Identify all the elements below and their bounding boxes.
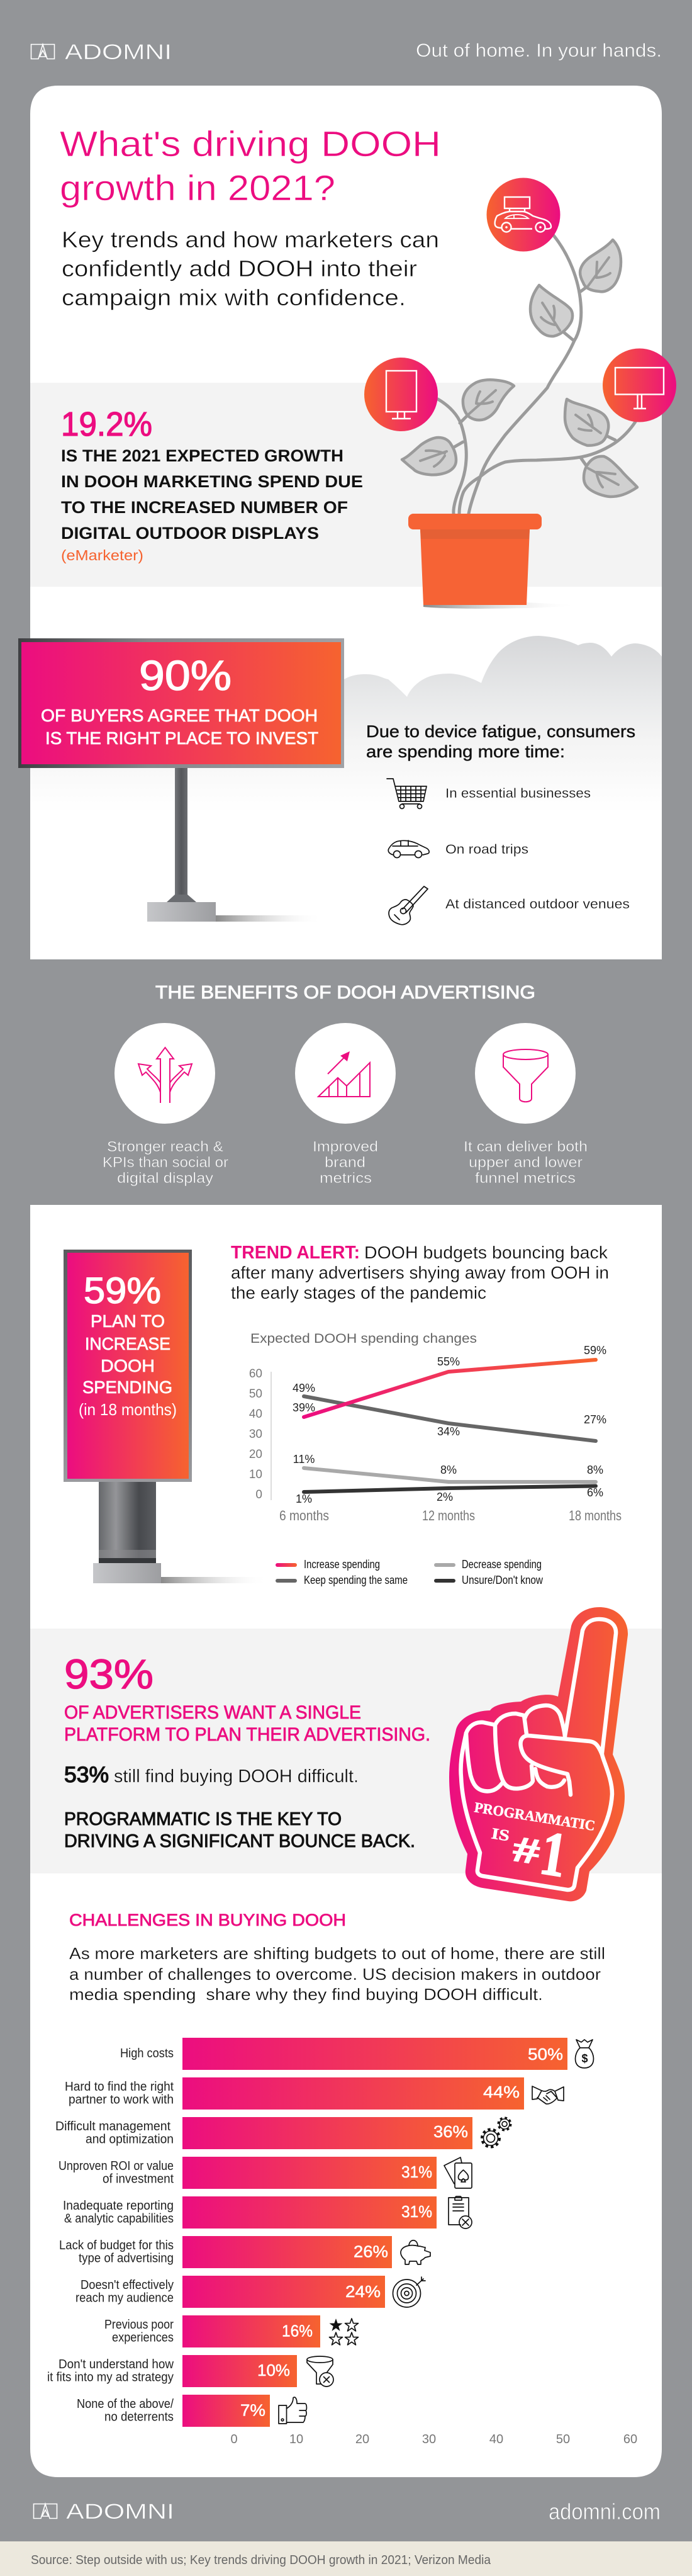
series: increase spending: [304, 1360, 596, 1417]
pot: [408, 514, 578, 609]
stat description: [64, 1702, 430, 1745]
benefit label: [464, 1138, 588, 1186]
icon: playing cards: [444, 2157, 472, 2188]
leaf: [584, 456, 637, 497]
series: unsure: [304, 1486, 596, 1492]
foam finger text: #: [510, 1828, 543, 1872]
bar: management: and optimization: [86, 2133, 174, 2147]
big number: 19.2%: [61, 405, 152, 443]
icon: diverging arrows: [114, 1023, 215, 1124]
benefit: brand metrics: [295, 1023, 396, 1186]
bar: unproven ROI: 31%: [401, 2162, 432, 2181]
billboard cone: [167, 895, 196, 902]
billboard statement: PLAN TO: [91, 1311, 165, 1331]
icon: star rating: [330, 2319, 359, 2345]
challenges paragraph: media spending share why they find buying DOOH difficult.: [69, 1985, 543, 2004]
x axis labels: 6 months: [279, 1508, 329, 1523]
leaf: [402, 438, 456, 475]
bar: unproven ROI: of investment: [103, 2172, 174, 2186]
series: decrease spending: [304, 1468, 596, 1482]
foam finger outline: [460, 1619, 616, 1890]
leaf: [463, 380, 514, 420]
header logo: [31, 40, 172, 64]
bar chart x axis: 60: [623, 2432, 637, 2446]
foam finger illustration: [449, 1607, 628, 1901]
bar: unproven ROI: Unproven ROI or value: [59, 2159, 174, 2173]
icon: clipboard: [449, 2196, 472, 2229]
bar chart: challenges in buying DOOH: [47, 2038, 637, 2446]
icon: guitar: [389, 886, 428, 925]
list: outdoor venues: [389, 886, 630, 925]
bar: ad strategy: [47, 2355, 333, 2387]
list: outdoor venues: At distanced outdoor venues: [445, 897, 630, 912]
legend: Keep spending the same: [304, 1574, 408, 1586]
bar chart x axis: 0: [230, 2432, 238, 2446]
billboard screen: [21, 642, 341, 764]
bar: poor experiences: Previous poor: [104, 2318, 174, 2332]
bar chart x axis: 30: [422, 2432, 436, 2446]
bar: reach audience: 24%: [345, 2282, 381, 2301]
data labels: 1%: [296, 1493, 312, 1505]
billboard statement: SPENDING: [82, 1377, 172, 1397]
bar chart x axis: 40: [489, 2432, 503, 2446]
clouds backdrop: [30, 636, 662, 812]
data labels: 11%: [293, 1453, 315, 1466]
legend: Decrease spending: [462, 1558, 542, 1571]
benefit label: metrics: [320, 1170, 372, 1186]
data labels: 6%: [587, 1486, 603, 1499]
bar: none of the above: None of the above/: [77, 2397, 174, 2411]
bar chart x axis: 10: [289, 2432, 303, 2446]
list: road trips: On road trips: [445, 842, 528, 857]
billboard base: [93, 1563, 161, 1583]
trend alert text: after many advertisers shying away from OOH in: [231, 1263, 609, 1282]
stat: 19.2 percent: [61, 405, 363, 563]
device fatigue text: Due to device fatigue, consumers: [366, 722, 635, 741]
footer logo: [34, 2500, 174, 2524]
subtitle: [62, 227, 439, 310]
benefit: funnel metrics: [464, 1023, 588, 1186]
bar: right partner: 44%: [483, 2082, 520, 2101]
trend alert text: [231, 1243, 609, 1302]
programmatic statement: PROGRAMMATIC IS THE KEY TO: [64, 1809, 342, 1829]
y axis: 60: [249, 1367, 262, 1381]
plant illustration: [364, 178, 676, 609]
icon: thumbs up: [279, 2397, 306, 2424]
source bar: [0, 2541, 692, 2576]
data labels: 39%: [293, 1401, 315, 1414]
bar: poor experiences: [104, 2315, 359, 2347]
bar: high costs: High costs: [120, 2047, 174, 2060]
programmatic statement: DRIVING A SIGNIFICANT BOUNCE BACK.: [64, 1831, 415, 1851]
bar chart x axis: 50: [556, 2432, 570, 2446]
foam finger shape: [449, 1607, 628, 1901]
bar: unproven ROI: [59, 2157, 472, 2189]
icon: funnel with cross: [307, 2356, 333, 2387]
data labels: 2%: [437, 1491, 453, 1503]
data labels: [293, 1344, 606, 1505]
stat description: DIGITAL OUTDOOR DISPLAYS: [61, 524, 319, 543]
source note: (eMarketer): [61, 547, 143, 563]
icon: piggy bank: [401, 2240, 430, 2264]
billboard pole: [99, 1482, 156, 1563]
icon: funnel: [475, 1023, 576, 1124]
53 percent note: 53%: [64, 1763, 109, 1787]
billboard base: [147, 902, 216, 922]
benefit label: [313, 1138, 378, 1186]
benefit label: KPIs than social or: [103, 1154, 228, 1170]
bar: right partner: Hard to find the right: [65, 2080, 174, 2094]
subtitle: campaign mix with confidence.: [62, 285, 406, 310]
y axis: [249, 1367, 271, 1501]
bar: right partner: [65, 2077, 564, 2110]
bar: reach audience: reach my audience: [75, 2291, 174, 2305]
billboard: 59 percent: [64, 1250, 268, 1583]
icon: car with billboard circle: [487, 178, 560, 252]
data labels: 8%: [440, 1464, 457, 1476]
billboard shadow: [161, 1577, 268, 1583]
bar: reporting: [63, 2196, 472, 2229]
bar: reporting: Inadequate reporting: [63, 2199, 174, 2213]
billboard: 90 percent: [18, 638, 344, 922]
bar: none of the above: 7%: [240, 2401, 265, 2420]
foam finger text: PROGRAMMATIC: [473, 1799, 596, 1834]
data labels: 27%: [584, 1413, 606, 1426]
billboard statement: [79, 1311, 177, 1419]
trend alert text: TREND ALERT:: [231, 1243, 360, 1263]
billboard pole: [175, 768, 187, 902]
list: essential businesses: [387, 779, 591, 808]
leaf: [530, 285, 572, 336]
trend alert text: DOOH budgets bouncing back: [364, 1243, 608, 1262]
title: What's driving DOOH: [60, 124, 441, 164]
heading: challenges: CHALLENGES IN BUYING DOOH: [69, 1911, 346, 1929]
chart title: Expected DOOH spending changes: [250, 1331, 477, 1346]
icon: gears: [482, 2118, 511, 2147]
billboard statement: INCREASE: [85, 1334, 170, 1353]
y axis: 30: [249, 1428, 262, 1441]
billboard statement: [41, 706, 318, 748]
bar: right partner: partner to work with: [69, 2093, 174, 2106]
data labels: 59%: [584, 1344, 606, 1357]
bar: management: [55, 2117, 511, 2149]
icon: handshake: [532, 2086, 564, 2104]
icon: landscape billboard circle: [603, 349, 676, 422]
stat description: TO THE INCREASED NUMBER OF: [61, 498, 348, 517]
panel: lower white card: [30, 1205, 662, 2477]
line chart: expected DOOH spending changes: [249, 1331, 622, 1586]
heading: benefits: THE BENEFITS OF DOOH ADVERTISING: [155, 983, 535, 1003]
big number: 59%: [84, 1270, 161, 1311]
source bar: Source: Step outside with us; Key trends driving DOOH growth in 2021; Verizon Media: [31, 2553, 491, 2567]
stat description: IN DOOH MARKETING SPEND DUE: [61, 472, 363, 491]
challenges paragraph: [69, 1944, 605, 2004]
bar: ad strategy: 10%: [257, 2361, 290, 2380]
bar: lack of budget: type of advertising: [79, 2251, 174, 2265]
x axis labels: 12 months: [422, 1508, 475, 1523]
billboard statement: IS THE RIGHT PLACE TO INVEST: [45, 728, 318, 748]
bar: high costs: 50%: [528, 2045, 563, 2064]
benefit label: It can deliver both: [464, 1138, 588, 1155]
device fatigue text: are spending more time:: [366, 742, 565, 761]
big number: 90%: [139, 652, 232, 699]
billboard statement: OF BUYERS AGREE THAT DOOH: [41, 706, 318, 725]
foam finger text: 1: [536, 1817, 571, 1890]
bar: reporting: 31%: [401, 2202, 432, 2221]
billboard screen: [67, 1253, 189, 1479]
list: road trips: [388, 840, 528, 857]
billboard statement: DOOH: [101, 1356, 155, 1376]
header tagline: Out of home. In your hands.: [416, 40, 662, 61]
data labels: 55%: [437, 1355, 460, 1368]
billboard frame: [64, 1250, 192, 1482]
bar chart x axis: [230, 2432, 637, 2446]
x axis labels: 18 months: [569, 1508, 622, 1523]
icon: shopping cart: [387, 779, 427, 808]
benefit: stronger reach: [103, 1023, 228, 1186]
benefit label: brand: [325, 1154, 366, 1170]
challenges paragraph: As more marketers are shifting budgets to out of home, there are still: [69, 1944, 605, 1963]
icon: money bag: [576, 2040, 593, 2068]
stat: 93 percent: [64, 1651, 430, 1851]
device fatigue text: [366, 722, 635, 761]
x axis labels: [279, 1508, 622, 1523]
bar: reach audience: Doesn't effectively: [81, 2278, 174, 2292]
bar: reporting: & analytic capabilities: [64, 2212, 174, 2226]
bar: poor experiences: experiences: [112, 2330, 174, 2344]
bar: reach audience: [75, 2276, 425, 2308]
y axis: 20: [249, 1448, 262, 1461]
stat description: IS THE 2021 EXPECTED GROWTH: [61, 446, 343, 465]
stat description: OF ADVERTISERS WANT A SINGLE: [64, 1702, 361, 1723]
icon: car: [388, 840, 429, 857]
bar: management: 36%: [433, 2122, 468, 2141]
title: [60, 124, 441, 208]
billboard statement: (in 18 months): [79, 1400, 177, 1419]
53 percent note: [64, 1763, 359, 1787]
y axis: 10: [249, 1468, 262, 1481]
bar: ad strategy: it fits into my ad strategy: [47, 2371, 174, 2385]
bar: high costs: [120, 2038, 593, 2070]
subtitle: confidently add DOOH into their: [62, 256, 417, 281]
foam finger text: IS: [490, 1825, 511, 1844]
legend: Increase spending: [304, 1558, 380, 1571]
y axis: 0: [255, 1488, 262, 1501]
header logo: ADOMNI: [65, 40, 172, 64]
icon: rising chart: [295, 1023, 396, 1124]
benefit label: funnel metrics: [475, 1170, 576, 1186]
footer logo: ADOMNI: [66, 2500, 174, 2524]
panel: grey stat band: [30, 383, 662, 587]
footer url: adomni.com: [549, 2499, 661, 2524]
billboard frame: [18, 638, 344, 768]
plant stems: [438, 235, 635, 514]
series: keep spending the same: [304, 1396, 596, 1441]
benefit label: upper and lower: [469, 1154, 583, 1170]
y axis: 40: [249, 1408, 262, 1421]
data labels: 49%: [293, 1382, 315, 1394]
icon: target: [393, 2277, 425, 2307]
bar: lack of budget: Lack of budget for this: [59, 2239, 174, 2252]
benefit label: digital display: [117, 1170, 214, 1186]
benefit label: Improved: [313, 1138, 378, 1155]
panel: intro white card: [30, 86, 662, 959]
benefit label: Stronger reach &: [107, 1138, 223, 1155]
bar: none of the above: no deterrents: [104, 2410, 174, 2424]
bar: management: Difficult management: [55, 2120, 170, 2133]
icon: money bag: $: [581, 2052, 588, 2065]
bar: ad strategy: Don't understand how: [59, 2358, 174, 2371]
list: essential businesses: In essential businesses: [445, 786, 591, 801]
bar: lack of budget: 26%: [354, 2242, 388, 2261]
leaf: [565, 399, 608, 446]
bar: none of the above: [77, 2395, 306, 2427]
foam finger text: [473, 1799, 596, 1890]
bar chart x axis: 20: [355, 2432, 369, 2446]
legend: Unsure/Don't know: [462, 1574, 544, 1586]
bar: poor experiences: 16%: [282, 2322, 313, 2341]
legend: [276, 1558, 544, 1586]
challenges paragraph: a number of challenges to overcome. US decision makers in outdoor: [69, 1965, 601, 1984]
stat description: [61, 446, 363, 543]
title: growth in 2021?: [60, 168, 335, 208]
big number: 93%: [64, 1651, 153, 1697]
trend alert text: the early stages of the pandemic: [231, 1283, 486, 1302]
bar: lack of budget: [59, 2236, 430, 2268]
programmatic statement: [64, 1809, 415, 1851]
icon: portrait billboard circle: [364, 358, 438, 431]
billboard shadow: [216, 915, 323, 922]
data labels: 34%: [437, 1425, 460, 1438]
53 percent note: still find buying DOOH difficult.: [114, 1766, 359, 1787]
stat description: PLATFORM TO PLAN THEIR ADVERTISING.: [64, 1724, 430, 1745]
benefit label: [103, 1138, 228, 1186]
data labels: 8%: [587, 1464, 603, 1476]
leaf: [580, 240, 621, 291]
subtitle: Key trends and how marketers can: [62, 227, 439, 252]
panel: grey programmatic band: [30, 1629, 662, 1873]
y axis: 50: [249, 1387, 262, 1401]
